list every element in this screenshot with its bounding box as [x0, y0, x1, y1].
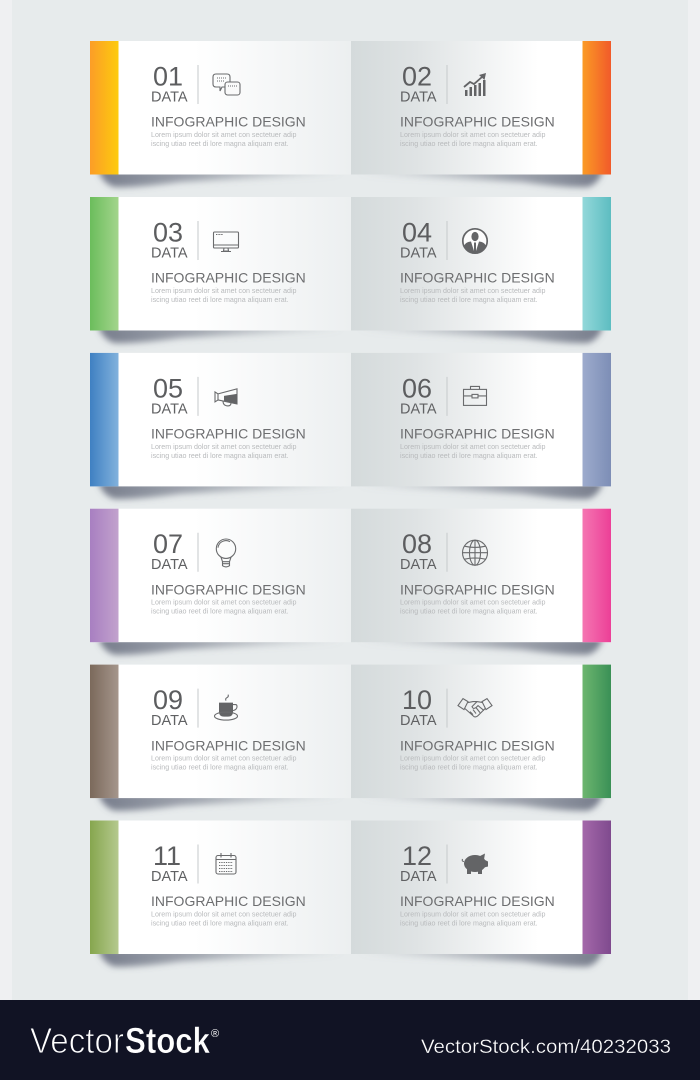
data label: DATA: [151, 90, 188, 106]
card shadow: [356, 169, 603, 187]
number: 01: [153, 62, 183, 92]
number: 03: [153, 218, 183, 248]
card body: [351, 353, 611, 486]
body text: Lorem ipsum dolor sit amet con sectetuer adip: [400, 910, 546, 918]
data label: DATA: [151, 401, 188, 417]
colour tab: [582, 820, 611, 954]
body text: [151, 287, 297, 304]
card shadow: [356, 637, 603, 655]
card body: [351, 509, 611, 642]
icon: calendar: [216, 853, 236, 874]
icon: light bulb: [216, 539, 236, 567]
icon: piggy bank: [462, 854, 488, 874]
icon: growth chart: [464, 73, 486, 96]
footer logo: Stock: [125, 1020, 211, 1061]
body text: Lorem ipsum dolor sit amet con sectetuer adip: [400, 755, 546, 763]
footer logo: ®: [211, 1028, 219, 1040]
body text: [400, 443, 546, 460]
body text: [400, 287, 546, 304]
body text: Lorem ipsum dolor sit amet con sectetuer adip: [151, 755, 297, 763]
data label: DATA: [151, 557, 188, 573]
heading: INFOGRAPHIC DESIGN: [400, 426, 555, 442]
icon: monitor: [214, 232, 238, 252]
data label: DATA: [400, 713, 437, 729]
body text: iscing utiao reet di lore magna aliquam erat.: [151, 452, 289, 460]
card shadow: [98, 325, 345, 343]
number: 10: [402, 685, 432, 715]
icon: briefcase: [464, 386, 486, 405]
footer logo: [30, 1020, 219, 1061]
body text: Lorem ipsum dolor sit amet con sectetuer adip: [151, 287, 297, 295]
colour tab: [582, 665, 611, 798]
card 06: [351, 353, 611, 499]
footer logo: Vector: [30, 1020, 124, 1061]
heading: INFOGRAPHIC DESIGN: [151, 893, 306, 909]
heading: INFOGRAPHIC DESIGN: [151, 426, 306, 442]
number: 07: [153, 529, 183, 559]
body text: iscing utiao reet di lore magna aliquam erat.: [400, 764, 538, 772]
heading: INFOGRAPHIC DESIGN: [400, 893, 555, 909]
card shadow: [98, 637, 345, 655]
data label: DATA: [151, 246, 188, 262]
card 01: [90, 41, 351, 187]
body text: [151, 599, 297, 616]
colour tab: [90, 353, 118, 486]
number: 04: [402, 218, 432, 248]
body text: iscing utiao reet di lore magna aliquam erat.: [151, 296, 289, 304]
body text: iscing utiao reet di lore magna aliquam erat.: [151, 608, 289, 616]
body text: Lorem ipsum dolor sit amet con sectetuer adip: [151, 443, 297, 451]
card shadow: [98, 481, 345, 499]
icon: chat bubbles: [213, 74, 240, 95]
footer band: [0, 1000, 700, 1080]
icon: business person: [463, 229, 487, 253]
card 07: [90, 509, 351, 655]
card body: [90, 665, 351, 798]
card 10: [351, 665, 611, 811]
heading: INFOGRAPHIC DESIGN: [151, 114, 306, 130]
body text: iscing utiao reet di lore magna aliquam erat.: [400, 920, 538, 928]
number: 02: [402, 62, 432, 92]
heading: INFOGRAPHIC DESIGN: [400, 737, 555, 753]
card shadow: [356, 793, 603, 811]
body text: [151, 131, 297, 148]
number: 11: [153, 841, 181, 871]
card shadow: [356, 325, 603, 343]
card 05: [90, 353, 351, 499]
body text: iscing utiao reet di lore magna aliquam erat.: [151, 920, 289, 928]
body text: Lorem ipsum dolor sit amet con sectetuer adip: [151, 131, 297, 139]
card shadow: [356, 481, 603, 499]
card 04: [351, 197, 611, 343]
card shadow: [356, 948, 603, 967]
card shadow: [98, 948, 345, 967]
data label: DATA: [400, 246, 437, 262]
card body: [351, 41, 611, 174]
data label: DATA: [151, 869, 188, 885]
heading: INFOGRAPHIC DESIGN: [151, 270, 306, 286]
data label: DATA: [400, 869, 437, 885]
data label: DATA: [151, 713, 188, 729]
colour tab: [90, 509, 118, 642]
icon: coffee cup: [214, 695, 238, 720]
card shadow: [98, 793, 345, 811]
number: 09: [153, 685, 183, 715]
body text: iscing utiao reet di lore magna aliquam erat.: [400, 140, 538, 148]
body text: [151, 755, 297, 772]
heading: INFOGRAPHIC DESIGN: [400, 270, 555, 286]
number: 06: [402, 373, 432, 403]
body text: [151, 443, 297, 460]
card 03: [90, 197, 351, 343]
heading: INFOGRAPHIC DESIGN: [400, 581, 555, 597]
card shadow: [98, 169, 345, 187]
heading: INFOGRAPHIC DESIGN: [151, 737, 306, 753]
body text: Lorem ipsum dolor sit amet con sectetuer adip: [151, 599, 297, 607]
icon: globe: [462, 540, 488, 565]
body text: Lorem ipsum dolor sit amet con sectetuer adip: [400, 131, 546, 139]
body text: iscing utiao reet di lore magna aliquam erat.: [400, 608, 538, 616]
data label: DATA: [400, 557, 437, 573]
body text: Lorem ipsum dolor sit amet con sectetuer adip: [400, 287, 546, 295]
body text: iscing utiao reet di lore magna aliquam erat.: [400, 452, 538, 460]
card body: [90, 820, 351, 954]
body text: Lorem ipsum dolor sit amet con sectetuer adip: [400, 599, 546, 607]
body text: iscing utiao reet di lore magna aliquam erat.: [151, 140, 289, 148]
card 11: [90, 820, 351, 967]
colour tab: [582, 353, 611, 486]
card body: [90, 197, 351, 330]
body text: Lorem ipsum dolor sit amet con sectetuer adip: [400, 443, 546, 451]
number: 12: [402, 841, 432, 871]
body text: [151, 910, 297, 928]
card body: [351, 197, 611, 330]
footer image id: VectorStock.com/40232033: [421, 1037, 671, 1058]
colour tab: [582, 509, 611, 642]
colour tab: [582, 197, 611, 330]
body text: [400, 755, 546, 772]
card body: [90, 509, 351, 642]
data label: DATA: [400, 90, 437, 106]
card body: [351, 820, 611, 954]
colour tab: [90, 820, 118, 954]
body text: [400, 910, 546, 928]
card body: [351, 665, 611, 798]
colour tab: [582, 41, 611, 174]
number: 08: [402, 529, 432, 559]
colour tab: [90, 197, 118, 330]
card 02: [351, 41, 611, 187]
heading: INFOGRAPHIC DESIGN: [151, 581, 306, 597]
body text: Lorem ipsum dolor sit amet con sectetuer adip: [151, 910, 297, 918]
icon: handshake: [458, 699, 492, 717]
card 12: [351, 820, 611, 967]
body text: iscing utiao reet di lore magna aliquam erat.: [151, 764, 289, 772]
card body: [90, 353, 351, 486]
number: 05: [153, 373, 183, 403]
body text: [400, 131, 546, 148]
heading: INFOGRAPHIC DESIGN: [400, 114, 555, 130]
icon: megaphone: [215, 389, 237, 406]
data label: DATA: [400, 401, 437, 417]
colour tab: [90, 665, 118, 798]
card 08: [351, 509, 611, 655]
colour tab: [90, 41, 118, 174]
card 09: [90, 665, 351, 811]
card body: [90, 41, 351, 174]
body text: iscing utiao reet di lore magna aliquam erat.: [400, 296, 538, 304]
body text: [400, 599, 546, 616]
